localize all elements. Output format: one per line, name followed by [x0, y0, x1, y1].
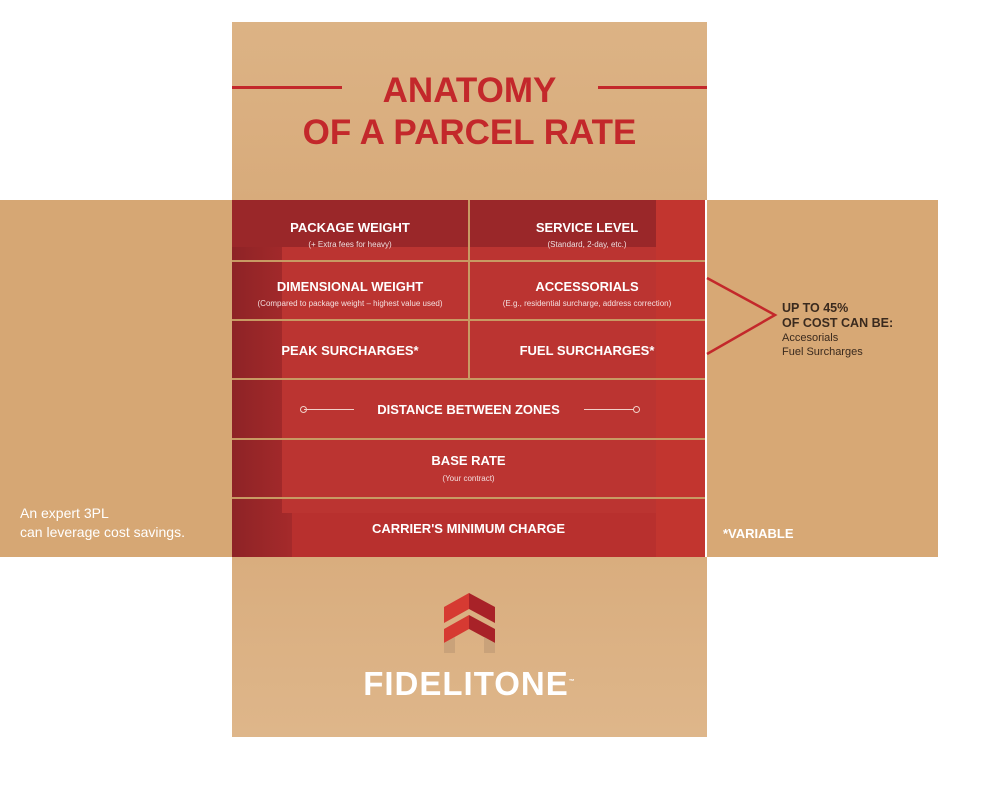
- text: expert 3PL: [20, 505, 185, 540]
- row: distance between zones: [300, 402, 640, 417]
- icon: logo chevron: [444, 593, 495, 653]
- panel: right flap: [707, 200, 938, 557]
- panel: red rate grid: (Compared to package weight – highest value used): [258, 299, 442, 308]
- panel: red rate grid: (E.g., residential surcharge, address correction): [503, 299, 671, 308]
- cell: service level: SERVICE LEVEL: [536, 220, 638, 235]
- row: carrier's minimum charge: CARRIER'S MINIMUM CHARGE: [372, 521, 565, 536]
- panel: left flap: [0, 200, 232, 557]
- logo text: FIDELITONE™: [363, 665, 576, 702]
- callout: up to 45%: UP TO 45%: [782, 301, 848, 315]
- callout: up to 45%: [782, 301, 893, 358]
- text: expert 3PL: An expert 3PL: [20, 505, 109, 521]
- callout: up to 45%: Accesorials: [782, 332, 838, 344]
- arrow: bracket: [706, 276, 778, 356]
- callout: up to 45%: OF COST CAN BE:: [782, 316, 893, 330]
- cell: dimensional weight: DIMENSIONAL WEIGHT: [277, 279, 423, 294]
- title: ANATOMY: [383, 71, 556, 110]
- cell: accessorials: ACCESSORIALS: [535, 279, 639, 294]
- cell: peak surcharges: PEAK SURCHARGES*: [281, 343, 419, 358]
- row: distance between zones: DISTANCE BETWEEN ZONES: [377, 402, 560, 417]
- panel: red rate grid: (Your contract): [442, 474, 495, 483]
- cell: package weight: PACKAGE WEIGHT: [290, 220, 410, 235]
- text: expert 3PL: can leverage cost savings.: [20, 524, 185, 540]
- title: OF A PARCEL RATE: [303, 113, 636, 152]
- cell: fuel surcharges: FUEL SURCHARGES*: [520, 343, 654, 358]
- panel: bottom flap: [232, 557, 707, 737]
- text: variable: *VARIABLE: [723, 526, 794, 541]
- callout: up to 45%: Fuel Surcharges: [782, 346, 863, 358]
- title: [303, 71, 636, 152]
- panel: red rate grid: (Standard, 2-day, etc.): [548, 240, 626, 249]
- panel: top flap: [232, 22, 707, 200]
- panel: red rate grid: (+ Extra fees for heavy): [308, 240, 392, 249]
- panel: red rate grid: [232, 200, 705, 557]
- decorative red lines: [232, 86, 342, 89]
- row: base rate: BASE RATE: [431, 453, 506, 468]
